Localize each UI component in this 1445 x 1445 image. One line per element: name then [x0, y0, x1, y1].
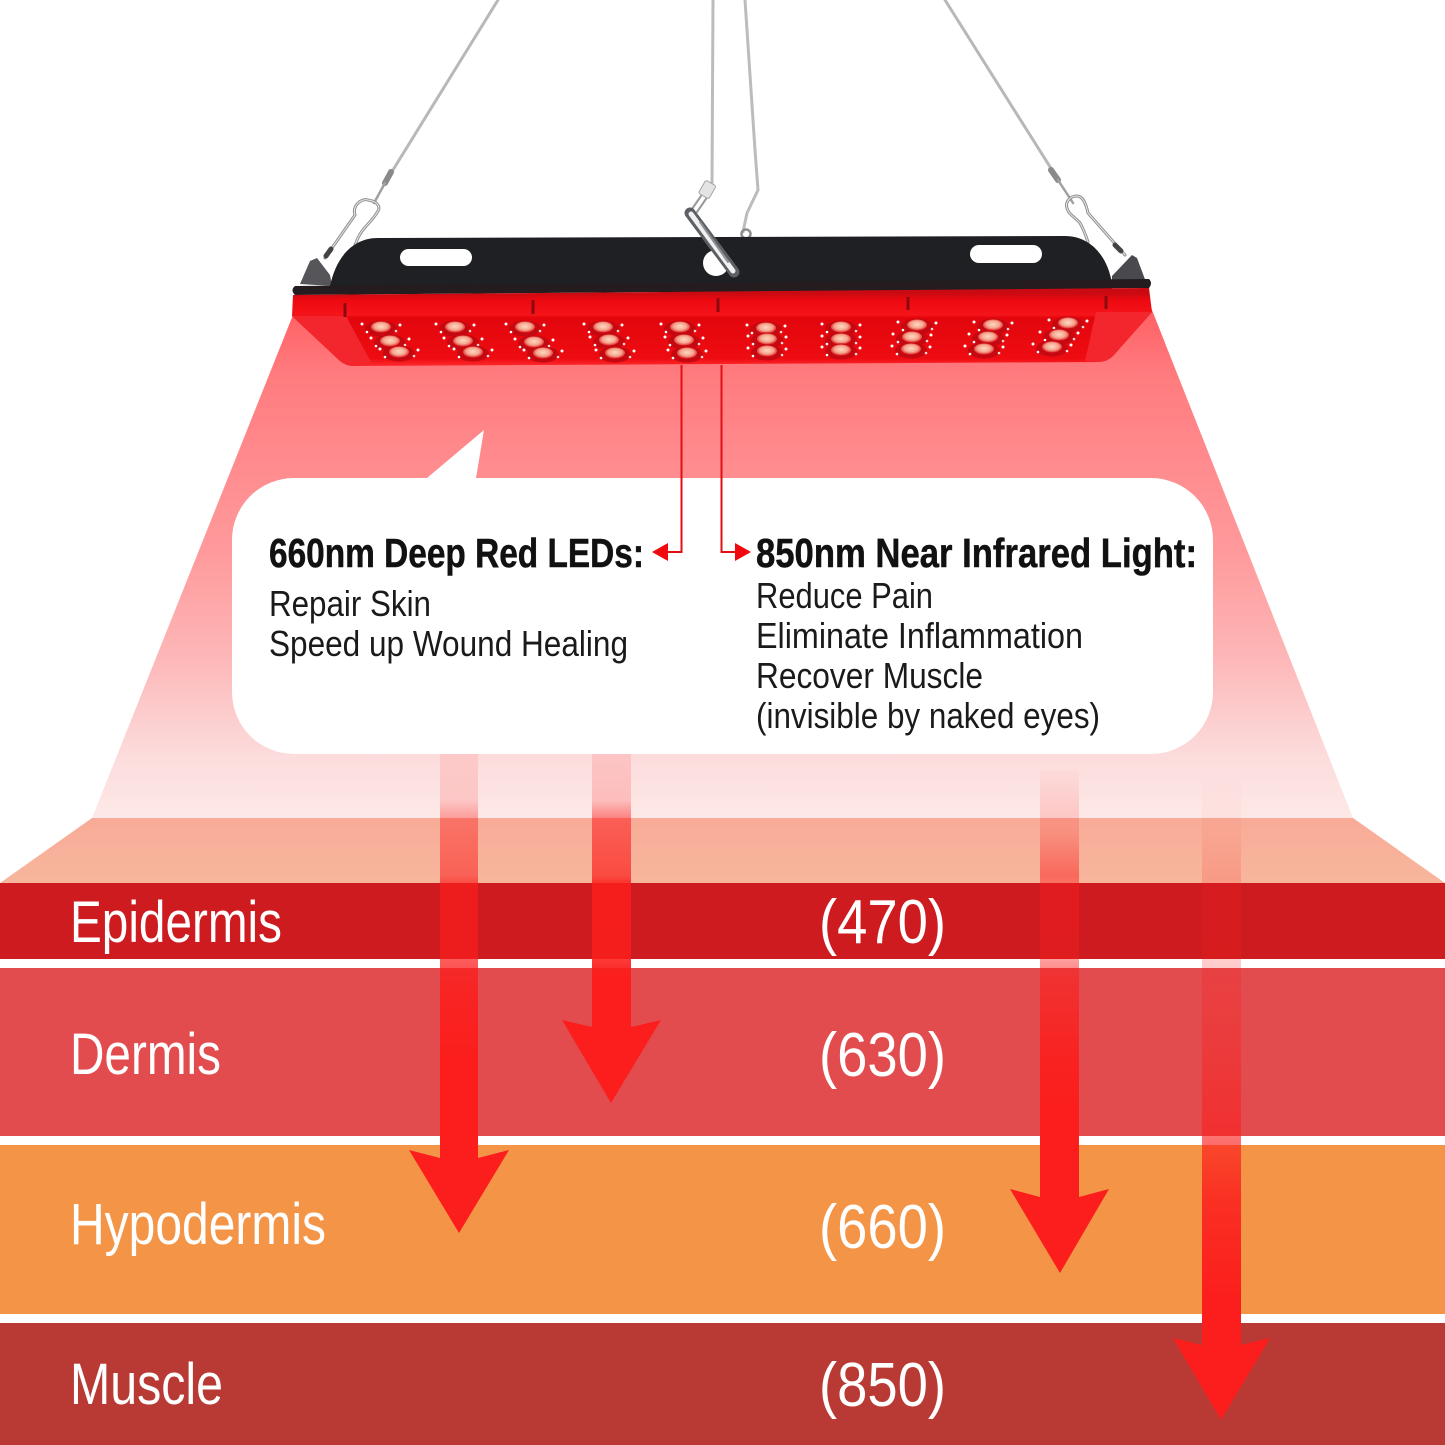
- layer: dermis band: [0, 968, 1445, 1136]
- label: muscle: Muscle: [70, 1352, 223, 1417]
- heading: 850nm: 850nm Near Infrared Light:: [756, 530, 1197, 576]
- layer: hypodermis band: [0, 1145, 1445, 1314]
- mounting ear left: [300, 258, 332, 286]
- left wire and hook: [325, 0, 498, 258]
- arrow: 660nm to hypodermis: [409, 754, 509, 1233]
- back plate: [330, 236, 1112, 292]
- carabiner clip: [690, 180, 734, 272]
- note: invisible: (invisible by naked eyes): [756, 695, 1100, 736]
- housing posts: [345, 296, 1106, 317]
- heading: 660nm: 660nm Deep Red LEDs:: [269, 530, 644, 576]
- led panel: [292, 180, 1152, 366]
- label: dermis: Dermis: [70, 1022, 221, 1087]
- leader line: 660nm: [652, 365, 682, 561]
- right wire and hook: [945, 0, 1125, 255]
- layer: muscle band: [0, 1323, 1445, 1445]
- benefit: wound healing: Speed up Wound Healing: [269, 623, 628, 664]
- arrow: 850nm to hypodermis: [1010, 770, 1109, 1273]
- label: hypodermis: Hypodermis: [70, 1192, 326, 1257]
- text block: 660nm deep red: [269, 530, 644, 664]
- layer: epidermis band: [0, 883, 1445, 959]
- benefit: reduce pain: Reduce Pain: [756, 575, 933, 616]
- center wires: [712, 0, 713, 184]
- center hanging hole: [703, 250, 729, 276]
- mounting ear right: [1112, 255, 1146, 284]
- lens side wedge right: [1085, 312, 1152, 362]
- light beam: [92, 305, 1353, 818]
- led modules: [360, 316, 1088, 362]
- value: 630: (630): [819, 1021, 946, 1090]
- edge strip: [292, 279, 1151, 295]
- text block: 850nm near infrared: [756, 530, 1197, 736]
- benefit: repair skin: Repair Skin: [269, 583, 431, 624]
- label: epidermis: Epidermis: [70, 890, 282, 955]
- lens side wedge left: [292, 316, 372, 366]
- skin surface: [0, 818, 1445, 883]
- callout bubble: [232, 430, 1213, 754]
- red lens housing: [292, 288, 1152, 366]
- value: 470: (470): [819, 888, 946, 957]
- handle slot left: [400, 249, 472, 266]
- handle slot right: [970, 245, 1042, 263]
- arrow: 660nm to dermis: [562, 754, 661, 1103]
- hanging wires and hooks: [325, 0, 1125, 258]
- arrow: 850nm to muscle: [1173, 775, 1270, 1420]
- benefit: recover muscle: Recover Muscle: [756, 655, 983, 696]
- leader line: 850nm: [722, 365, 751, 561]
- value: 850: (850): [819, 1351, 946, 1420]
- value: 660: (660): [819, 1193, 946, 1262]
- benefit: inflammation: Eliminate Inflammation: [756, 615, 1083, 656]
